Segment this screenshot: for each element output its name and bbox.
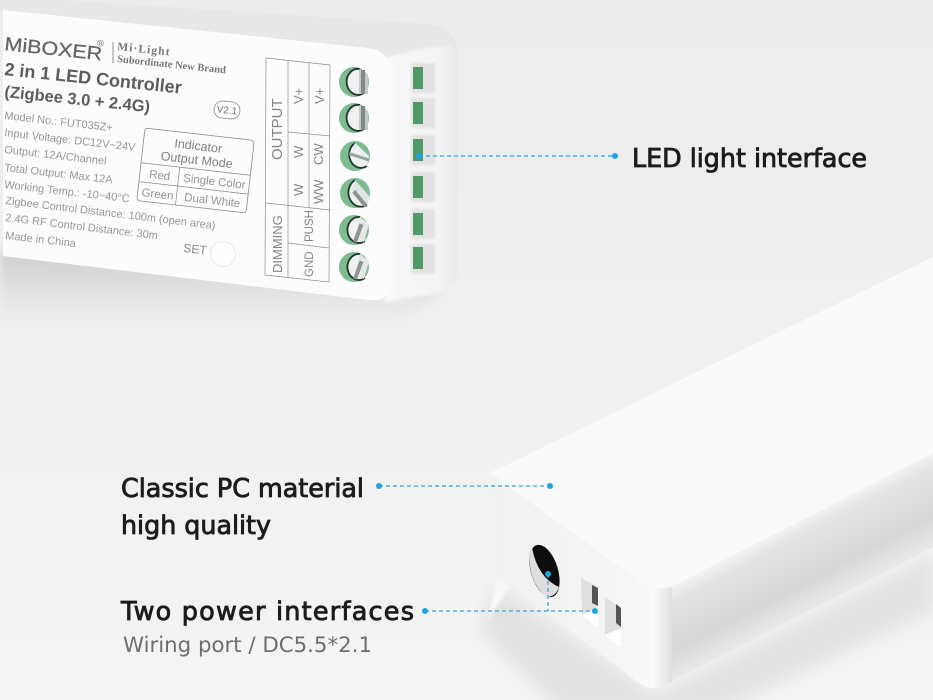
terminal label table (265, 58, 330, 282)
version badge (213, 100, 241, 120)
specification list: 2.4G RF Control Distance: 30m (5, 212, 158, 242)
leader line (376, 483, 553, 489)
specification list: Model No.: FUT035Z+ (4, 110, 113, 134)
indicator table: Output Mode (160, 149, 233, 171)
label (121, 474, 364, 541)
terminal labels: W (291, 145, 306, 158)
registered mark: ® (97, 38, 105, 49)
indicator table: Indicator (174, 136, 223, 156)
specification list: Total Output: Max 12A (4, 162, 114, 186)
device shadow (0, 250, 445, 335)
indicator table (137, 128, 254, 213)
terminal labels: GND (304, 251, 316, 277)
specification list: Input Voltage: DC12V~24V (4, 127, 137, 154)
label: Classic PC material (121, 474, 364, 504)
specification list: Made in China (5, 230, 77, 250)
device side face (385, 44, 457, 302)
indicator table: Red (148, 169, 171, 183)
panel: enclosure device (480, 257, 933, 700)
terminal labels: OUTPUT (269, 98, 286, 160)
wire port 1 (581, 578, 598, 628)
enclosure shadow (480, 555, 933, 700)
leader line (422, 571, 598, 614)
panel: LED controller device (0, 0, 457, 335)
indicator table: Single Color (183, 173, 246, 192)
label: Two power interfaces (120, 597, 414, 627)
divider (112, 42, 114, 63)
panel: PC material callout (121, 474, 553, 541)
product title: (Zigbee 3.0 + 2.4G) (4, 83, 151, 116)
logo text: MiBOXER (3, 34, 103, 65)
specification list (4, 110, 216, 250)
terminal labels: PUSH (304, 210, 316, 242)
leader line (416, 153, 618, 159)
indicator table: Dual White (184, 192, 241, 210)
terminal labels: DIMMING (270, 215, 285, 273)
specification list: Zigbee Control Distance: 100m (open area) (5, 195, 216, 232)
terminal labels: CW (311, 143, 326, 165)
specification list: Working Temp.: -10~40°C (4, 179, 130, 205)
set button: SET (183, 241, 208, 257)
set button (183, 241, 236, 266)
floor reflection (488, 578, 510, 620)
device top face (0, 0, 457, 70)
LED wire ports (411, 63, 435, 274)
sub-brand: Mi·Light (117, 41, 171, 59)
DC power jack (524, 541, 565, 601)
terminal labels: W (291, 183, 306, 196)
sub-brand: Subordinate New Brand (117, 54, 226, 76)
indicator table: Green (141, 187, 174, 203)
panel: LED light interface callout (416, 144, 867, 174)
terminal labels (269, 88, 327, 277)
brand logo (3, 34, 226, 76)
wire port 2 (605, 597, 621, 648)
label: high quality (121, 511, 271, 541)
version badge: V2.1 (216, 104, 238, 118)
panel: power interfaces callout (120, 571, 598, 657)
product title (4, 59, 183, 116)
screw terminals (339, 67, 370, 282)
enclosure front face (490, 473, 672, 688)
sublabel: Wiring port / DC5.5*2.1 (123, 633, 372, 657)
enclosure top face (490, 257, 933, 589)
sub-brand (117, 41, 226, 76)
device front face (3, 10, 393, 300)
terminal labels: V+ (291, 88, 306, 104)
product title: 2 in 1 LED Controller (4, 59, 183, 98)
terminal labels: V+ (312, 88, 327, 104)
specification list: Output: 12A/Channel (4, 144, 107, 168)
enclosure right face (640, 453, 933, 688)
terminal labels: WW (311, 179, 326, 204)
label: LED light interface (632, 144, 867, 174)
